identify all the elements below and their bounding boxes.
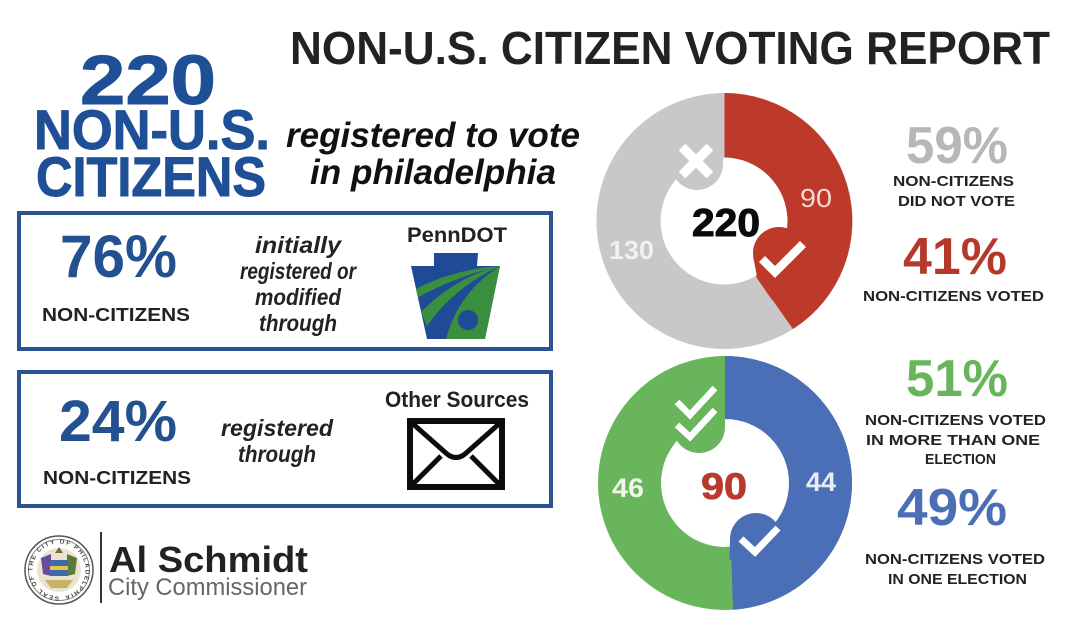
stat: 49% voted in one election: IN ONE ELECTION xyxy=(888,571,1027,588)
value: 90: 90 xyxy=(701,466,747,507)
stat: 59% did not vote: 59% xyxy=(906,117,1008,175)
text: initially registered or modified through: through xyxy=(259,310,337,336)
label: non-citizens: NON-CITIZENS xyxy=(42,305,190,325)
stat: 49% voted in one election xyxy=(865,479,1045,588)
stat: 59% did not vote: DID NOT VOTE xyxy=(898,193,1015,210)
label: other sources: Other Sources xyxy=(385,387,529,412)
subheading: registered to vote in philadelphia xyxy=(286,116,580,192)
stat: 51% voted in more than one election: IN MORE THAN ONE xyxy=(866,432,1040,449)
subheading: registered to vote in philadelphia: in philadelphia xyxy=(310,153,556,192)
stat: 41% voted: NON-CITIZENS VOTED xyxy=(863,288,1044,305)
stat: 59% did not vote: NON-CITIZENS xyxy=(893,173,1014,190)
icon: city seal: SEAL OF THE CITY OF PHILADELPHIA xyxy=(28,539,90,601)
headline: 220 non-U.S. citizens: CITIZENS xyxy=(36,145,266,208)
stat: 51% voted in more than one election xyxy=(865,350,1046,468)
stat: 59% did not vote xyxy=(893,117,1015,210)
logo: Al Schmidt city commissioner xyxy=(24,532,308,605)
value: 44: 44 xyxy=(806,467,836,497)
text: initially registered or modified through: initially xyxy=(255,232,342,258)
stat: 51% voted in more than one election: ELECTION xyxy=(925,451,996,468)
stat: 49% voted in one election: 49% xyxy=(897,479,1007,537)
icon: cross xyxy=(682,147,710,175)
title: NON-U.S. CITIZEN VOTING REPORT xyxy=(290,22,1050,74)
icon: check xyxy=(741,528,778,552)
icon: envelope xyxy=(410,421,502,487)
subheading: registered to vote in philadelphia: registered to vote xyxy=(286,116,580,155)
stat: 49% voted in one election: NON-CITIZENS VOTED xyxy=(865,551,1045,568)
stat: 41% voted xyxy=(863,228,1044,305)
icon: double check xyxy=(677,388,715,437)
value: 220: 220 xyxy=(692,202,760,245)
stat: 76%: 76% xyxy=(60,223,177,290)
stat: 24%: 24% xyxy=(59,389,177,454)
chart: donut voted once vs more than once xyxy=(598,356,852,610)
value: 90: 90 xyxy=(800,183,832,213)
headline: 220 non-U.S. citizens: NON-U.S. xyxy=(34,98,270,161)
text: registered through xyxy=(221,415,334,467)
value: 130: 130 xyxy=(609,235,654,265)
text: initially registered or modified through: registered or xyxy=(240,258,357,284)
text: initially registered or modified through xyxy=(240,232,357,336)
headline: 220 non-U.S. citizens xyxy=(34,41,270,208)
label: PennDOT: PennDOT xyxy=(407,224,507,247)
panel: other sources registrations xyxy=(19,372,551,506)
stat: 41% voted: 41% xyxy=(903,228,1007,286)
text: registered through: registered xyxy=(221,415,334,441)
text: initially registered or modified through: modified xyxy=(255,284,342,310)
role: City Commissioner: City Commissioner xyxy=(108,574,307,601)
chart: donut voted vs did not vote xyxy=(596,93,852,349)
stat: 51% voted in more than one election: 51% xyxy=(906,350,1008,408)
name: Al Schmidt: Al Schmidt xyxy=(109,539,308,580)
icon: check xyxy=(762,244,803,272)
label: non-citizens: NON-CITIZENS xyxy=(43,468,191,488)
stat: 51% voted in more than one election: NON-CITIZENS VOTED xyxy=(865,412,1046,429)
text: registered through: through xyxy=(238,441,316,467)
headline: 220 non-U.S. citizens: 220 xyxy=(80,41,216,119)
icon: PennDOT keystone xyxy=(411,253,500,339)
panel: PennDOT registrations xyxy=(19,213,551,349)
value: 46: 46 xyxy=(612,473,644,503)
